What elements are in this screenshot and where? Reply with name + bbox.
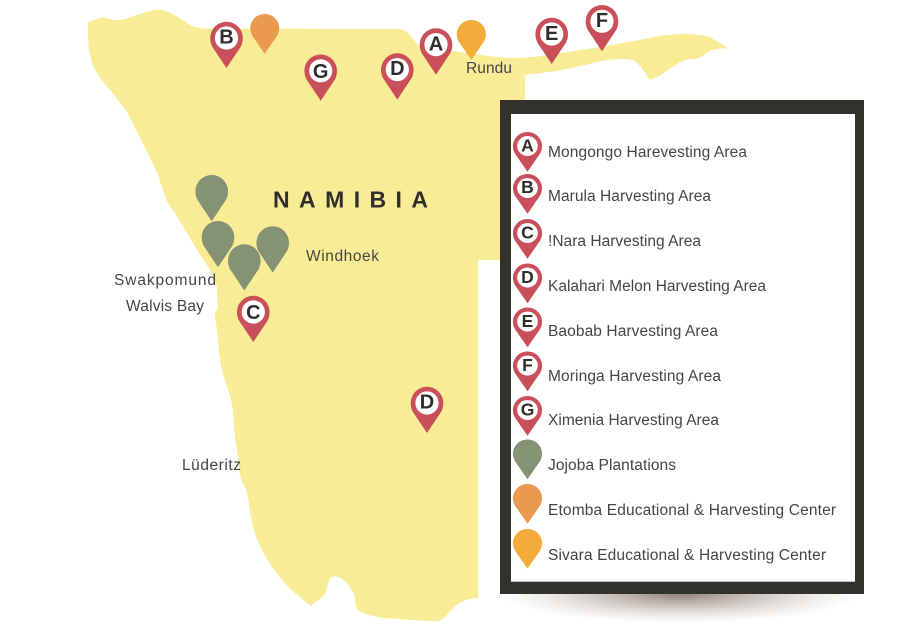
legend item: Etomba (513, 484, 836, 524)
pin: A mongongo (420, 28, 452, 75)
pin: B marula (210, 22, 243, 68)
legend item: F: F (522, 355, 533, 375)
legend panel (500, 100, 864, 594)
pins: jojoba plantations (195, 175, 289, 291)
heading: NAMIBIA: NAMIBIA (273, 186, 428, 212)
legend item: C: !Nara Harvesting Area (548, 233, 701, 250)
legend item: B: Marula Harvesting Area (548, 188, 711, 205)
pin: D kalahari melon north (381, 53, 414, 100)
legend item: Sivara (513, 529, 826, 569)
legend item: D: D (521, 267, 534, 287)
legend item: G (513, 396, 719, 436)
legend item: D: Kalahari Melon Harvesting Area (548, 278, 766, 295)
label: Lüderitz: Lüderitz (182, 457, 241, 474)
pin: C nara (237, 296, 270, 342)
legend item: Jojoba: Jojoba Plantations (548, 457, 676, 474)
legend item: G: Ximenia Harvesting Area (548, 412, 719, 429)
legend item: Etomba: Etomba Educational & Harvesting Center (548, 502, 836, 519)
legend item: A: A (521, 136, 534, 156)
pin: D kalahari melon south: D (420, 392, 434, 414)
legend item: C (513, 219, 701, 259)
label: Windhoek: Windhoek (306, 248, 379, 265)
pin: G ximenia (304, 55, 337, 101)
pin: Etomba centre (250, 14, 279, 54)
legend item: E: Baobab Harvesting Area (548, 323, 718, 340)
legend item: F: Moringa Harvesting Area (548, 368, 721, 385)
legend item: D (513, 263, 766, 303)
legend item: C: C (521, 222, 534, 242)
pin: F moringa: F (596, 10, 608, 32)
pin: D kalahari melon north: D (390, 58, 405, 80)
pin: A mongongo: A (429, 34, 443, 56)
pin: E baobab (535, 18, 568, 64)
map of Namibia (88, 10, 728, 622)
pin: C nara: C (246, 302, 261, 324)
pin: D kalahari melon south (411, 387, 443, 433)
legend item: B: B (521, 177, 534, 197)
label: Rundu: Rundu (466, 60, 512, 77)
legend item: F (513, 351, 721, 391)
pin: F moringa (586, 5, 618, 51)
legend item: A: Mongongo Harevesting Area (548, 144, 747, 161)
legend item: Sivara: Sivara Educational & Harvesting Center (548, 547, 826, 564)
legend item: B (513, 174, 711, 214)
legend item: E: E (522, 311, 533, 331)
legend item: G: G (521, 400, 534, 420)
label: Swakpomund: Swakpomund (114, 272, 216, 289)
pin: G ximenia: G (313, 61, 328, 83)
legend item: Jojoba (513, 439, 676, 479)
legend item: A (513, 132, 747, 172)
legend item: E (513, 307, 718, 347)
legend shadow (500, 565, 860, 623)
label: Walvis Bay: Walvis Bay (126, 298, 204, 315)
pin: B marula: B (219, 26, 234, 48)
pin: E baobab: E (545, 23, 558, 45)
pin: Sivara centre (457, 20, 486, 60)
